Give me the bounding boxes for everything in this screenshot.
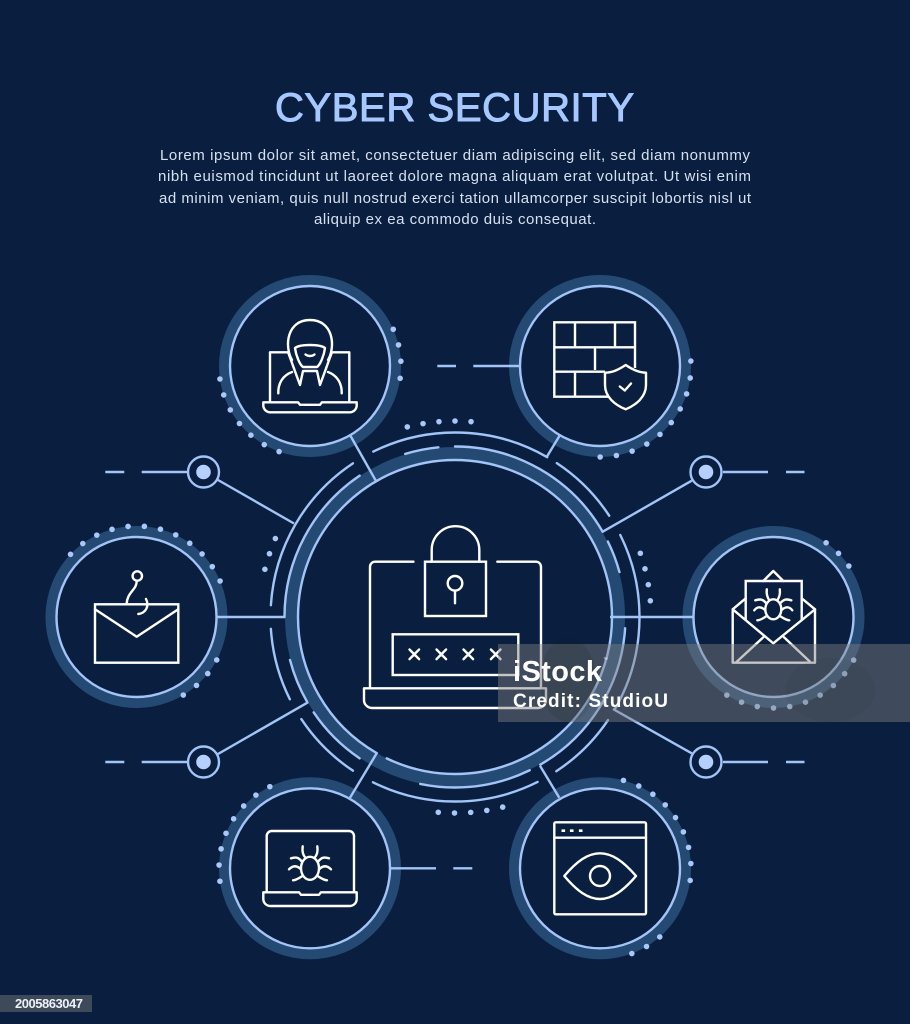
icon: browser window with eye (554, 822, 646, 914)
satellite: email with bug (682, 526, 864, 708)
satellite: laptop with bug (219, 777, 401, 959)
satellite: browser with eye (509, 777, 691, 959)
central hub rings (259, 421, 651, 813)
node: upper left (105, 456, 294, 524)
title: CYBER SECURITY (275, 86, 634, 130)
image id tag (0, 995, 92, 1012)
watermark: iStock credit: ™ (603, 657, 608, 663)
intro text block: ad minim veniam, quis null nostrud exerci tation ullamcorper suscipit lobortis nisl ut (159, 190, 752, 207)
intro text block (158, 147, 752, 228)
satellite: firewall with shield (509, 275, 691, 457)
image id tag: 2005863047 (15, 996, 83, 1011)
central icon: laptop with padlock and password (364, 526, 546, 708)
watermark: iStock credit: iStock (513, 656, 603, 688)
node: lower left (105, 702, 308, 778)
icon: bug on laptop (263, 831, 357, 906)
watermark: iStock credit (498, 638, 910, 722)
intro text block: nibh euismod tincidunt ut laoreet dolore magna aliquam erat volutpat. Ut wisi enim (158, 168, 751, 185)
satellite: phishing email (46, 526, 228, 708)
watermark: iStock credit: Credit: StudioU (513, 691, 668, 712)
intro text block: Lorem ipsum dolor sit amet, consectetuer diam adipiscing elit, sed diam nonummy (160, 147, 750, 164)
node: lower right (613, 709, 804, 778)
connector lines between hub and satellites (216, 366, 694, 868)
icon: brick wall and shield (554, 322, 646, 409)
node: upper right (603, 456, 804, 532)
icon: envelope with hook (95, 571, 178, 663)
icon: hacker at laptop (263, 320, 357, 412)
intro text block: aliquip ex ea commodo duis consequat. (314, 211, 596, 228)
satellite: hacker (219, 275, 401, 457)
icon: open envelope with bug letter (733, 571, 815, 663)
